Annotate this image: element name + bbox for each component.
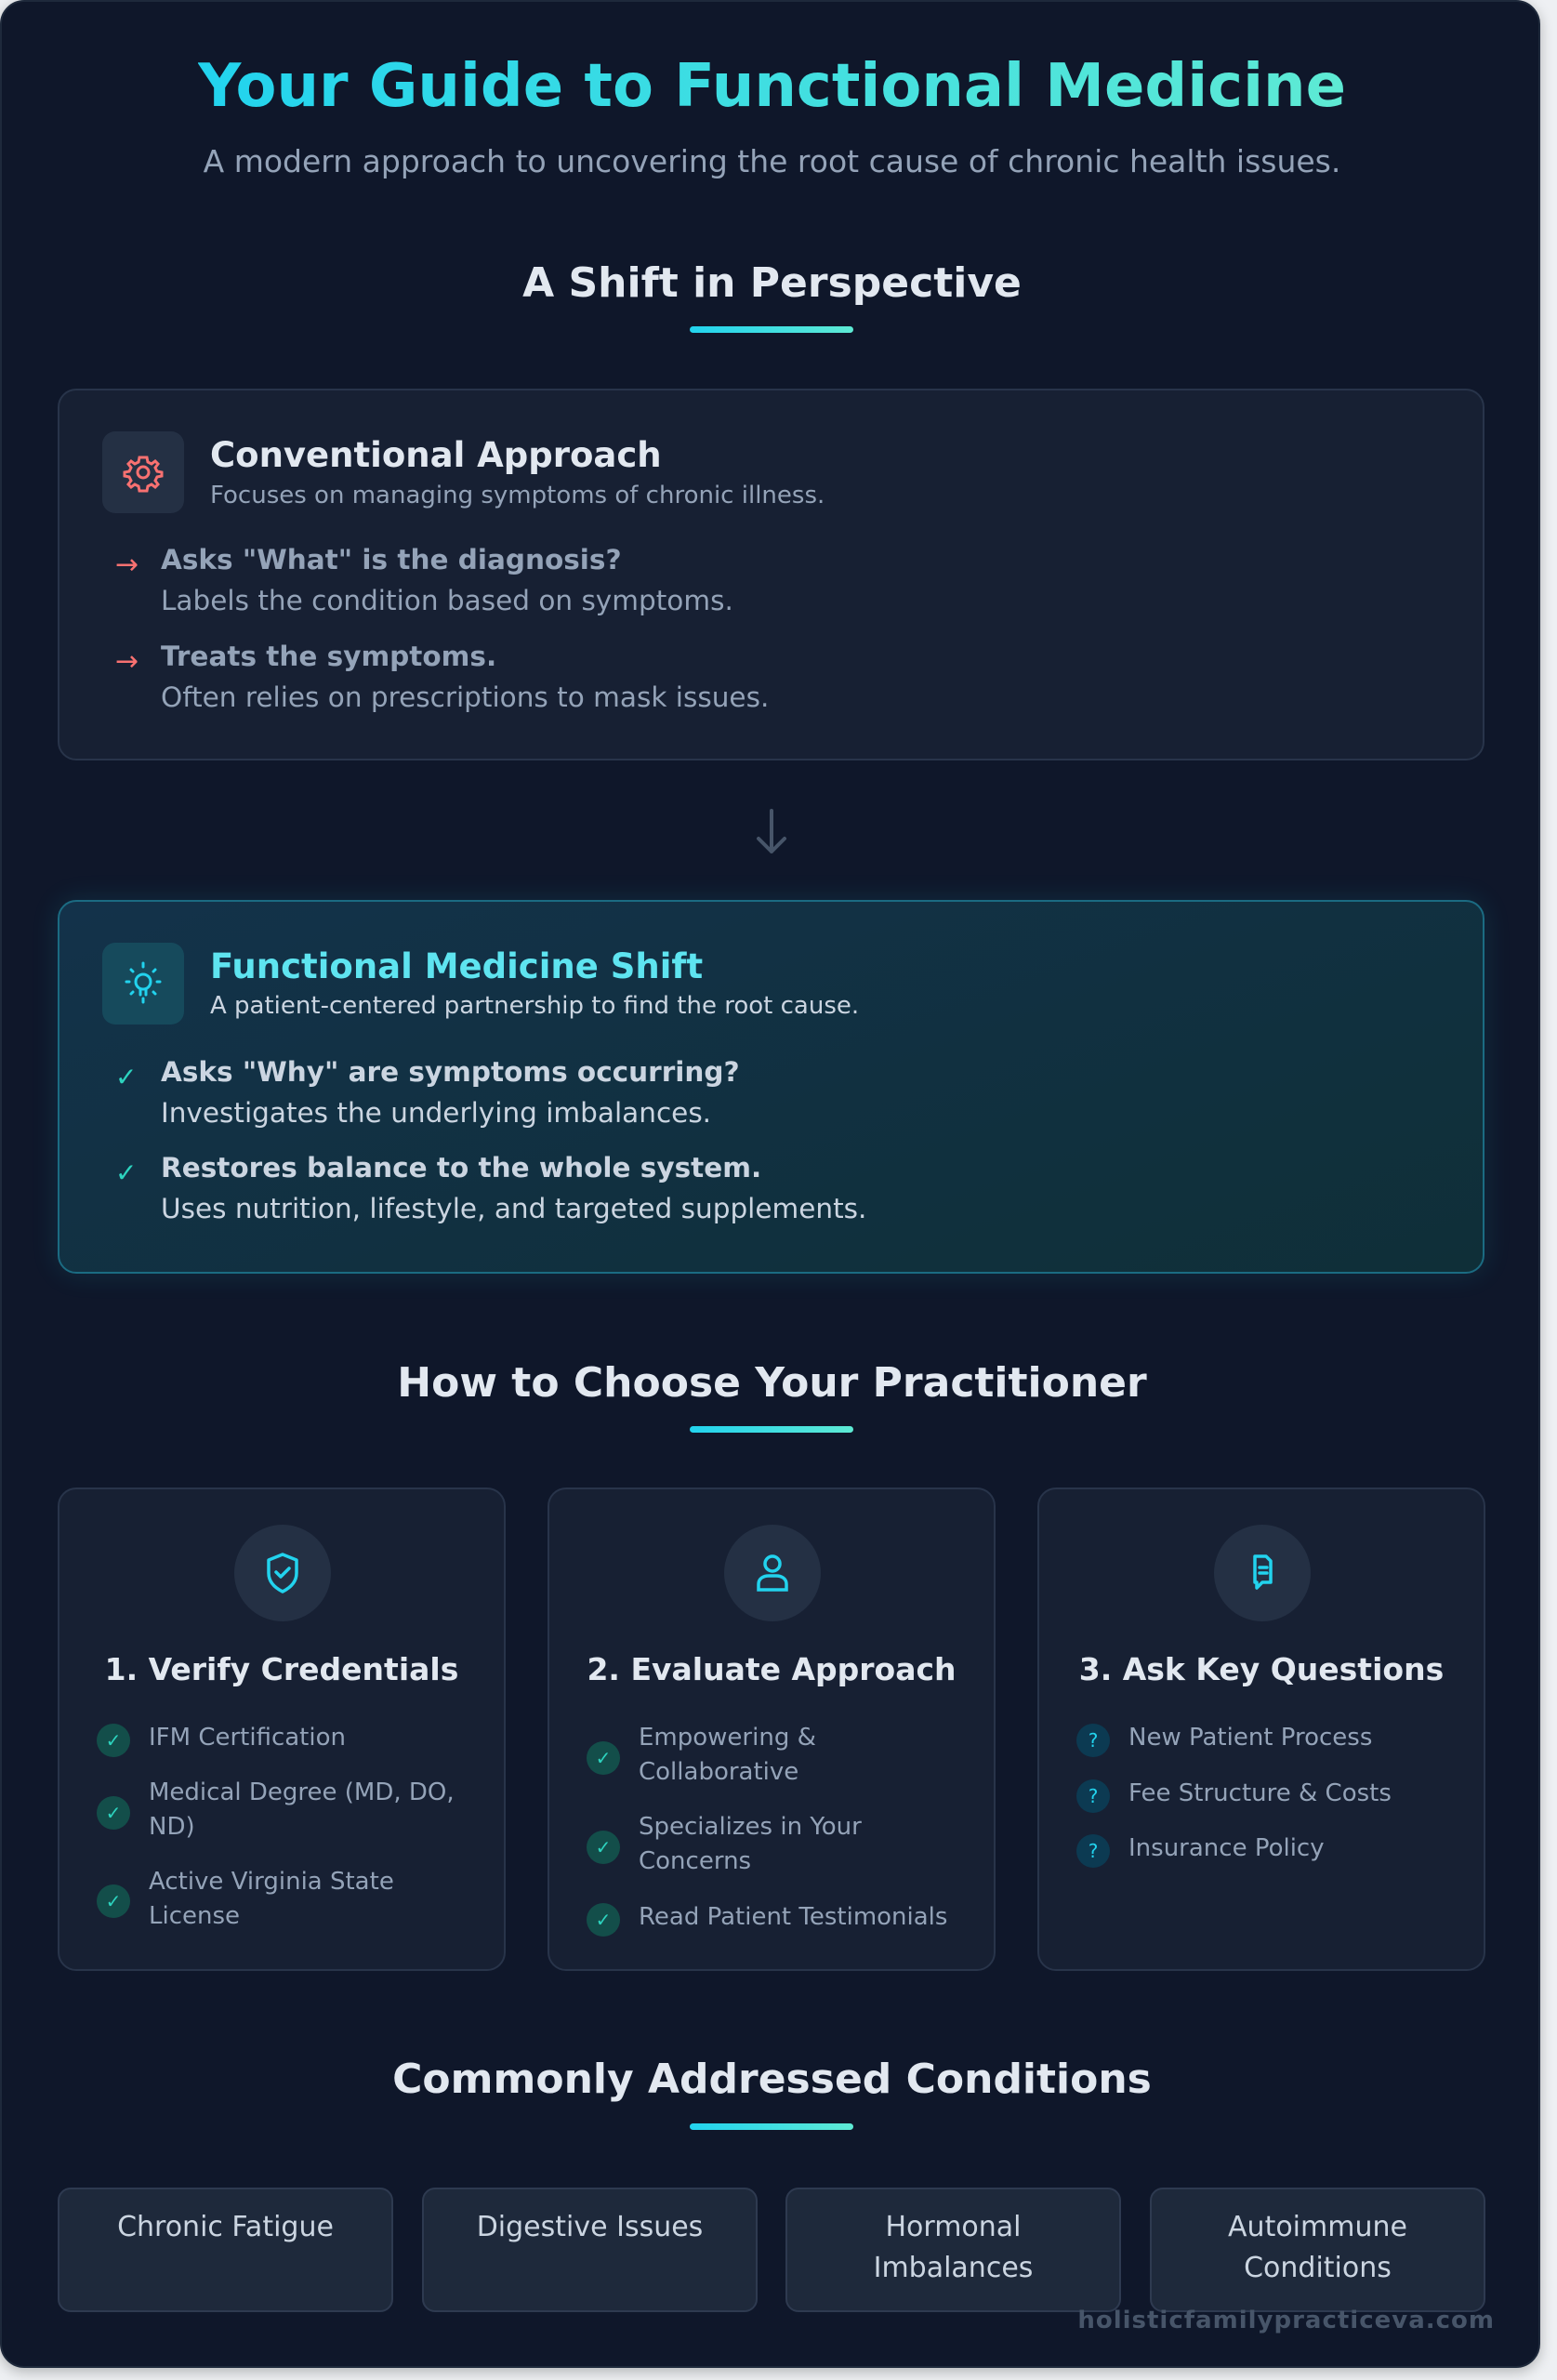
panel: verify credentials: ✓ bbox=[106, 1802, 121, 1824]
panel: ask key questions: Fee Structure & Costs bbox=[1128, 1779, 1392, 1807]
tile: chronic fatigue: Chronic Fatigue bbox=[117, 2211, 334, 2243]
subtitle: A modern approach to uncovering the root cause of chronic health issues. bbox=[204, 143, 1340, 179]
icon: person bbox=[724, 1525, 821, 1621]
card title: 1. Verify Credentials bbox=[105, 1651, 458, 1687]
tile: hormonal imbalances bbox=[785, 2188, 1121, 2312]
panel: verify credentials: IFM Certification bbox=[149, 1724, 346, 1752]
panel: verify credentials: ✓ bbox=[106, 1890, 121, 1912]
panel: ask key questions: Insurance Policy bbox=[1128, 1834, 1325, 1862]
icon: lightbulb bbox=[102, 943, 184, 1025]
tile: hormonal imbalances: Hormonal bbox=[885, 2211, 1022, 2243]
arrow: down bbox=[757, 809, 786, 853]
tile: hormonal imbalances: Imbalances bbox=[874, 2252, 1033, 2284]
heading: Functional Medicine Shift bbox=[210, 946, 703, 986]
panel: ask key questions: ? bbox=[1089, 1785, 1098, 1807]
panel: evaluate approach: Empowering & Collaborative bbox=[639, 1724, 816, 1786]
card title: 3. Ask Key Questions bbox=[1079, 1651, 1444, 1687]
item 1: ✓ bbox=[115, 1062, 137, 1092]
item 1: Investigates the underlying imbalances. bbox=[161, 1097, 711, 1129]
icon: document chat bbox=[1214, 1525, 1311, 1621]
item 2: → bbox=[115, 645, 139, 678]
item 2: Often relies on prescriptions to mask issues. bbox=[161, 681, 769, 713]
panel: ask key questions: ? bbox=[1089, 1840, 1098, 1862]
item 2: Treats the symptoms. bbox=[161, 641, 496, 672]
item 1: Asks "What" is the diagnosis? bbox=[161, 544, 622, 575]
panel: verify credentials bbox=[58, 1488, 506, 1971]
icon: gear bbox=[102, 431, 184, 513]
item 2 bbox=[115, 641, 769, 713]
tile: chronic fatigue bbox=[58, 2188, 393, 2312]
description: A patient-centered partnership to find the root cause. bbox=[210, 992, 859, 1020]
title: Your Guide to Functional Medicine bbox=[198, 52, 1346, 121]
description: Focuses on managing symptoms of chronic illness. bbox=[210, 482, 825, 509]
panel: verify credentials: Active Virginia State License bbox=[149, 1868, 394, 1930]
panel: evaluate approach: ✓ bbox=[596, 1909, 611, 1931]
heading: choose practitioner: How to Choose Your Practitioner bbox=[397, 1359, 1147, 1407]
item 1 bbox=[115, 1056, 740, 1129]
panel: evaluate approach bbox=[548, 1488, 996, 1971]
panel: verify credentials: ✓ bbox=[106, 1729, 121, 1752]
panel: ask key questions bbox=[1037, 1488, 1485, 1971]
panel: verify credentials: Medical Degree (MD, DO, ND) bbox=[149, 1778, 455, 1841]
item 1: Asks "Why" are symptoms occurring? bbox=[161, 1056, 740, 1088]
tile: digestive issues bbox=[422, 2188, 758, 2312]
heading: Conventional Approach bbox=[210, 435, 662, 475]
tile: autoimmune conditions bbox=[1150, 2188, 1485, 2312]
panel: evaluate approach: ✓ bbox=[596, 1836, 611, 1858]
item 1: → bbox=[115, 549, 139, 581]
card title: 2. Evaluate Approach bbox=[587, 1651, 957, 1687]
watermark: holisticfamilypracticeva.com bbox=[1077, 2307, 1495, 2334]
panel: functional medicine shift bbox=[58, 900, 1484, 1274]
item 1: Labels the condition based on symptoms. bbox=[161, 585, 733, 616]
tile: digestive issues: Digestive Issues bbox=[477, 2211, 703, 2243]
item 2 bbox=[115, 1152, 866, 1224]
item 2: Uses nutrition, lifestyle, and targeted supplements. bbox=[161, 1193, 866, 1224]
panel: evaluate approach: Specializes in Your Concerns bbox=[639, 1813, 862, 1875]
panel: evaluate approach: Read Patient Testimonials bbox=[639, 1903, 947, 1931]
panel: evaluate approach: ✓ bbox=[596, 1747, 611, 1769]
panel: ask key questions: ? bbox=[1089, 1729, 1098, 1752]
tile: autoimmune conditions: Conditions bbox=[1244, 2252, 1392, 2284]
item 1 bbox=[115, 544, 733, 616]
heading: shift in perspective: A Shift in Perspective bbox=[522, 259, 1022, 307]
item 2: ✓ bbox=[115, 1157, 137, 1188]
icon: shield bbox=[234, 1525, 331, 1621]
tile: autoimmune conditions: Autoimmune bbox=[1228, 2211, 1407, 2243]
heading: conditions: Commonly Addressed Conditions bbox=[392, 2056, 1152, 2103]
item 2: Restores balance to the whole system. bbox=[161, 1152, 761, 1183]
panel: conventional approach bbox=[58, 389, 1484, 760]
panel: ask key questions: New Patient Process bbox=[1128, 1724, 1372, 1752]
